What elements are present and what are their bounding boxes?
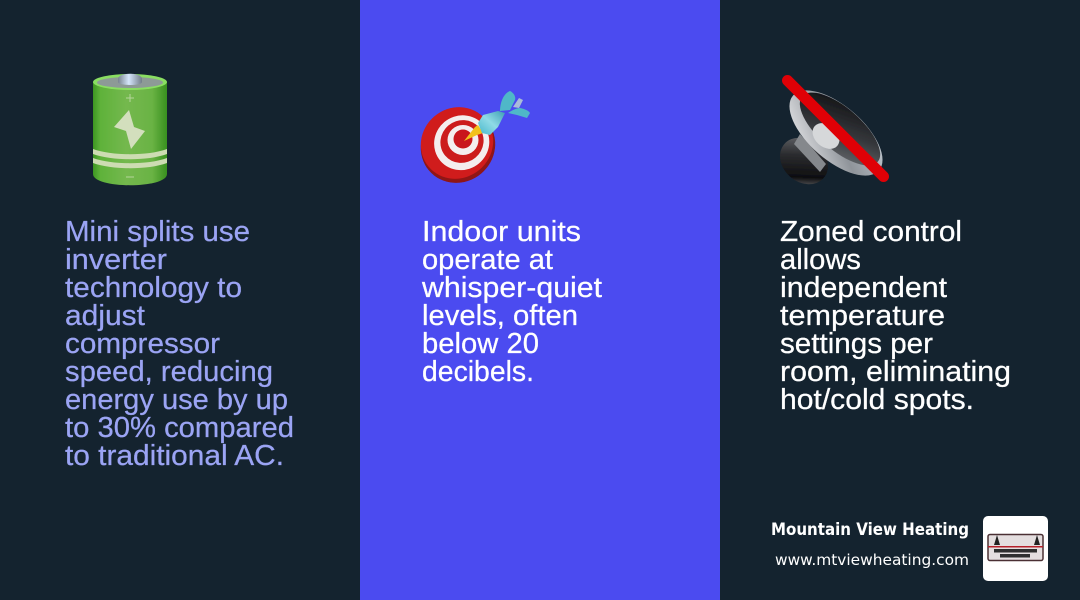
panel: right background bbox=[720, 0, 1080, 600]
text block: middle column bbox=[421, 216, 602, 388]
text block: left column: Mini splits use bbox=[65, 216, 250, 248]
brand name: Mountain View Heating bbox=[771, 520, 969, 539]
text block: left column bbox=[65, 216, 294, 472]
text block: middle column: Indoor units bbox=[422, 216, 581, 248]
icon: battery bbox=[93, 74, 167, 185]
panel: middle background bbox=[360, 0, 720, 600]
text block: middle column: operate at bbox=[422, 244, 553, 276]
text block: left column: to traditional AC. bbox=[65, 440, 284, 472]
icon: muted speaker bbox=[771, 75, 897, 194]
text block: right column: room, eliminating bbox=[780, 356, 1011, 388]
text block: left column: technology to bbox=[65, 272, 242, 304]
text block: left column: energy use by up bbox=[65, 384, 288, 416]
text block: right column: temperature bbox=[780, 300, 945, 332]
text block: left column: inverter bbox=[65, 244, 168, 276]
text block: middle column: below 20 bbox=[422, 328, 539, 360]
text block: left column: speed, reducing bbox=[65, 356, 273, 388]
text block: right column: settings per bbox=[780, 328, 934, 360]
text block: right column: allows bbox=[780, 244, 861, 276]
text block: right column: hot/cold spots. bbox=[780, 384, 974, 416]
text block: left column: to 30% compared bbox=[65, 412, 294, 444]
panel: left background bbox=[0, 0, 360, 600]
website url: www.mtviewheating.com bbox=[775, 551, 969, 569]
text block: middle column: levels, often bbox=[422, 300, 578, 332]
text block: left column: adjust bbox=[65, 300, 145, 332]
logo badge bbox=[983, 516, 1048, 581]
text block: right column: Zoned control bbox=[780, 216, 962, 248]
text block: middle column: whisper-quiet bbox=[421, 272, 602, 304]
text block: middle column: decibels. bbox=[422, 356, 534, 388]
text block: right column: independent bbox=[780, 272, 947, 304]
text block: right column bbox=[780, 216, 1011, 416]
icon: target with dart bbox=[406, 91, 530, 198]
text block: left column: compressor bbox=[65, 328, 221, 360]
